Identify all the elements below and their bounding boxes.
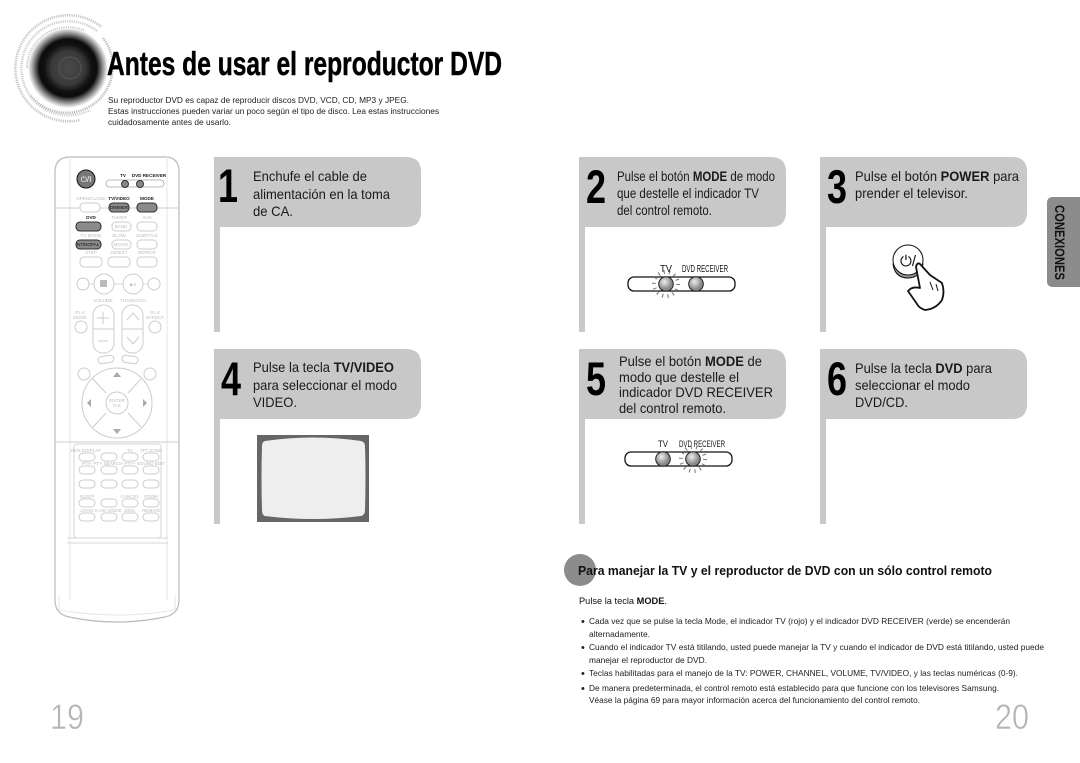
bullet list: • [581,683,585,695]
highlighted buttons: TV MODE [81,233,101,238]
transport buttons: TUNING/CH [120,298,146,303]
bullet list: Teclas habilitadas para el manejo de la TV: POWER, CHANNEL, VOLUME, TV/VIDEO, y las teclas numéricas (0-9). [589,668,1018,678]
bullet list: De manera predeterminada, el control remoto está establecido para que funcione con los televisores Samsung. [589,683,999,693]
panel: step 6: seleccionar el modo [855,377,970,393]
highlighted buttons: SLOW [112,233,126,238]
panel: step 6: Pulse la tecla DVD para [855,360,992,376]
highlighted buttons: NT/DOPAL [77,242,100,247]
panel: step 2: 2 [586,160,606,213]
highlighted buttons: STEP [85,250,97,255]
highlighted buttons: MOVIE [114,242,128,247]
numeric keypad: PTY- [82,461,92,466]
panel: step 1 [214,157,421,332]
panel: step 2: que destelle el indicador TV [617,185,760,201]
panel: step 1: 1 [218,159,238,212]
transport buttons [73,274,164,353]
bullet list: • [581,616,585,628]
bullet list: manejar el reproductor de DVD. [589,655,707,665]
panel: step 4 [214,349,421,524]
navigation ring: ENTER [109,398,125,403]
panel: step 1: alimentación en la toma [253,186,390,202]
transport buttons: PL II [75,310,85,315]
numeric keypad: TFT ZONE [140,448,162,453]
transport buttons: EFFECT [146,315,164,320]
panel: step 6 [820,349,1027,524]
panel: step 1: Enchufe el cable de [253,168,367,184]
numeric keypad: PTY SEARCH [93,461,123,466]
numeric keypad: CANCEL [121,494,140,499]
intro text: cuidadosamente antes de usarlo. [108,117,231,127]
numeric keypad [71,444,165,538]
numeric keypad: RDS DISPLAY [71,448,101,453]
indicator diagram: TV blinking: DVD RECEIVER [682,264,728,275]
highlighted buttons: REPEAT [138,250,156,255]
panel: step 2: Pulse el botón MODE de modo [617,168,775,184]
section tab: CONEXIONES: CONEXIONES [1052,205,1068,280]
highlighted buttons: TV/VIDEO [108,196,130,201]
panel: step 2 [579,157,786,332]
panel: step 5: 5 [586,352,606,405]
bullet list: • [581,668,585,680]
power button [77,170,95,188]
icon: TV screen [257,435,369,522]
numeric keypad: SLEEP [80,494,94,499]
numeric keypad: REMAIN [142,508,160,513]
transport buttons: MODE [73,315,87,320]
bullet list: alternadamente. [589,629,650,639]
navigation ring: O.K [113,403,122,408]
transport buttons: PL II [150,310,160,315]
title: Antes de usar el reproductor DVD [107,46,502,83]
section heading: Para manejar la TV y el reproductor de DVD con un sólo control remoto [578,563,992,578]
panel: step 3 [820,157,1027,332]
numeric keypad: S.VID MODE [94,508,122,513]
highlighted buttons: AUX [142,215,152,220]
remote control illustration [55,157,179,622]
subheading: Pulse la tecla MODE. [579,596,667,607]
highlighted buttons: OPEN/CLOSE [76,196,106,201]
bullet list: Véase la página 69 para mayor información acerca del funcionamiento del control remoto. [589,695,920,705]
highlighted buttons: DIGEST [110,250,128,255]
intro text: Estas instrucciones pueden variar un poco según el tipo de disco. Lea estas instrucciones [108,106,440,116]
panel: step 3: prender el televisor. [855,185,968,201]
indicator strip: TV [120,173,127,178]
icon: gray circle behind heading [564,554,596,586]
section tab: CONEXIONES [1047,197,1080,287]
navigation ring [78,355,156,438]
panel: step 2: del control remoto. [617,202,712,218]
highlighted buttons: SUBTITLE [136,233,158,238]
bullet list [581,616,1044,705]
panel: step 1: de CA. [253,203,293,219]
icon: speaker with circular text rings [15,15,113,121]
panel: step 5 [579,349,786,524]
numeric keypad: PTY+ [124,461,136,466]
bullet list: • [581,642,585,654]
intro text: Su reproductor DVD es capaz de reproducir discos DVD, VCD, CD, MP3 y JPEG. [108,95,409,105]
indicator diagram: DVD receiver blinking: TV [658,439,668,449]
highlighted buttons: BAND [115,224,128,229]
indicator diagram: DVD receiver blinking [625,439,732,471]
indicator diagram: DVD receiver blinking: DVD RECEIVER [679,439,725,449]
numeric keypad: ZOOM [144,494,158,499]
panel: step 4: para seleccionar el modo [253,377,397,393]
icon: hand pressing power button: ⏻/ [900,253,917,270]
intro text [108,95,440,127]
transport buttons: VOLUME [93,298,113,303]
highlighted buttons: DVD [86,215,97,220]
highlighted buttons: DIMMER [110,205,129,210]
panel: step 4: 4 [221,352,241,405]
panel: step 5: indicador DVD RECEIVER [619,384,773,400]
highlighted buttons: MODE [140,196,154,201]
panel: step 5: modo que destelle el [619,369,739,385]
panel: step 6: 6 [827,352,847,405]
indicator diagram: TV blinking: TV [660,264,672,275]
panel: step 5: del control remoto. [619,400,726,416]
transport buttons: ▶II [130,282,136,287]
panel: step 3: Pulse el botón POWER para [855,168,1019,184]
icon: hand pressing power button [893,245,944,310]
numeric keypad: TA [127,448,134,453]
numeric keypad: SOUND EDIT [137,461,165,466]
numeric keypad: LOGO [80,508,94,513]
bullet list: Cada vez que se pulse la tecla Mode, el indicador TV (rojo) y el indicador DVD RECEIVER (verde) se encenderán [589,616,1010,626]
panel: step 4: Pulse la tecla TV/VIDEO [253,359,394,375]
indicator strip [106,173,167,188]
panel: step 4: VIDEO. [253,394,297,410]
numeric keypad: DISC [125,508,136,513]
page number 20: 20 [995,698,1029,737]
panel: step 6: DVD/CD. [855,394,908,410]
indicator diagram: TV blinking [628,264,735,296]
page number 19: 19 [50,698,84,737]
panel: step 3: 3 [827,160,847,213]
power button: ⏻/I [81,175,91,184]
panel: step 5: Pulse el botón MODE de [619,353,762,369]
indicator strip: DVD RECEIVER [132,173,167,178]
highlighted buttons [76,196,158,267]
highlighted buttons: TUNER [111,215,128,220]
bullet list: Cuando el indicador TV está titilando, usted puede manejar la TV y cuando el indicador de DVD está titilando, usted puede [589,642,1044,652]
